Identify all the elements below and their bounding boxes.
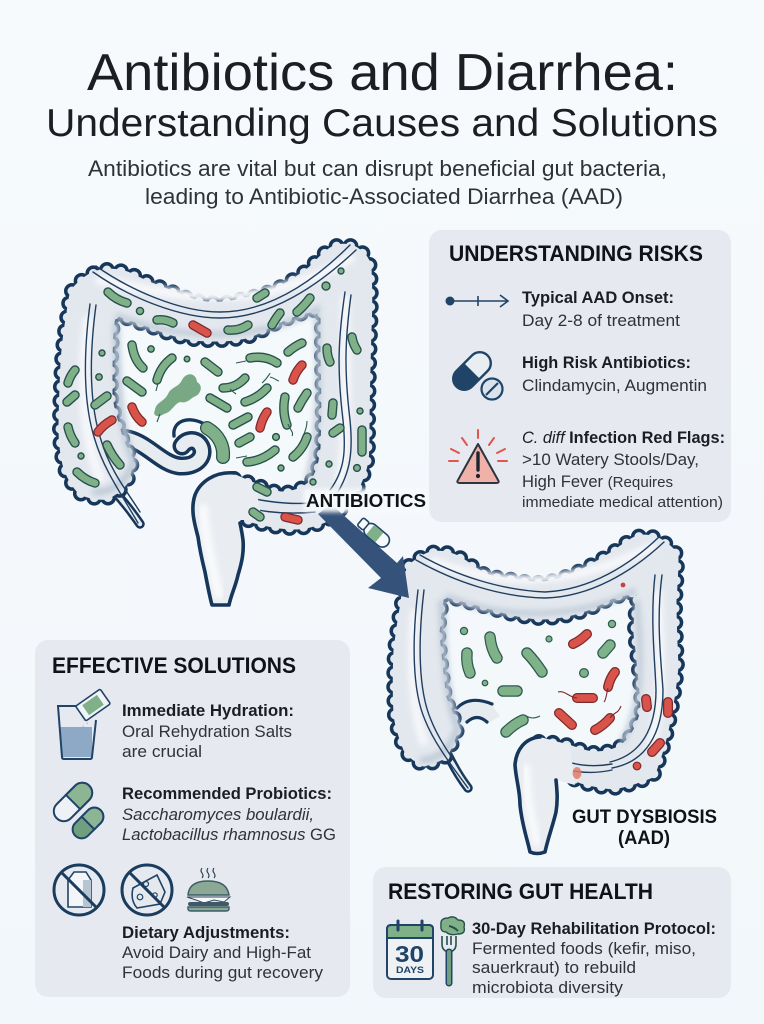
- text: high risk antibiotics: High Risk Antibiotics:: [522, 354, 691, 372]
- text: typical onset: Day 2-8 of treatment: [522, 312, 680, 330]
- icon: 30 day calendar: DAYS: [396, 965, 424, 976]
- arrow: antibiotics to dysbiosis: [318, 504, 409, 598]
- heading: restoring gut health: RESTORING GUT HEALTH: [388, 879, 653, 904]
- text: probiotics: Lactobacillus rhamnosus GG: [122, 826, 336, 844]
- text: red flags: [522, 429, 725, 511]
- label: antibiotics: ANTIBIOTICS: [306, 491, 426, 511]
- text: dietary: Foods during gut recovery: [122, 964, 324, 982]
- label: gut dysbiosis: GUT DYSBIOSIS: [572, 807, 717, 828]
- inner shading: [412, 545, 660, 760]
- text: hydration: Oral Rehydration Salts: [122, 723, 292, 741]
- text: high risk antibiotics: Clindamycin, Augmentin: [522, 377, 707, 395]
- label: gut dysbiosis: (AAD): [618, 828, 670, 849]
- text: rehabilitation protocol: Fermented foods (kefir, miso,: [472, 940, 696, 958]
- text: red flags: >10 Watery Stools/Day,: [522, 451, 699, 469]
- icon: glass with sachet: [58, 689, 110, 759]
- text: hydration: Immediate Hydration:: [122, 702, 294, 720]
- icon: pill and tablet: [449, 348, 502, 400]
- text: probiotics: Saccharomyces boulardii,: [122, 806, 314, 824]
- text: dietary: Dietary Adjustments:: [122, 924, 290, 942]
- red bacteria: [558, 583, 668, 779]
- ileum tube: [122, 420, 206, 466]
- text: dietary: Avoid Dairy and High-Fat: [122, 944, 311, 962]
- heading: understanding risks: UNDERSTANDING RISKS: [449, 241, 703, 266]
- icon: warning triangle: [449, 430, 507, 483]
- text: red flags: immediate medical attention): [522, 494, 723, 511]
- heading: effective solutions: EFFECTIVE SOLUTIONS: [52, 653, 296, 678]
- green bacteria: [67, 268, 363, 517]
- text: typical onset: Typical AAD Onset:: [522, 289, 674, 307]
- text: hydration: [122, 702, 294, 761]
- taenia lines: [414, 536, 664, 788]
- icon: timeline: [446, 295, 508, 307]
- text: rehabilitation protocol: sauerkraut) to rebuild: [472, 959, 636, 977]
- colon body: [60, 245, 371, 528]
- appendix: [113, 490, 140, 524]
- icon: antibiotic vial: [356, 516, 392, 550]
- text: rehabilitation protocol: [472, 920, 716, 997]
- text: typical onset: [522, 289, 680, 330]
- illustration: dysbiosis colon: [394, 536, 677, 854]
- icon: probiotic capsules: [50, 779, 107, 842]
- text: hydration: are crucial: [122, 743, 202, 761]
- red bacteria: [98, 325, 302, 520]
- icon: burger: [187, 868, 230, 911]
- green bacteria: [460, 620, 616, 732]
- inner shading: [84, 258, 350, 492]
- icon: fork with pickle: [441, 917, 464, 983]
- subtitle: leading to Antibiotic-Associated Diarrhea (AAD): [145, 184, 623, 209]
- text: probiotics: Recommended Probiotics:: [122, 785, 332, 803]
- text: rehabilitation protocol: microbiota diversity: [472, 979, 624, 997]
- subtitle: Antibiotics are vital but can disrupt beneficial gut bacteria,: [88, 156, 667, 181]
- appendix: [449, 757, 468, 788]
- taenia lines: [85, 245, 356, 523]
- title: Antibiotics and Diarrhea:: [87, 44, 678, 102]
- colon body: [394, 536, 677, 788]
- text: dietary: [122, 924, 324, 982]
- panel: restoring gut health: [373, 867, 731, 998]
- icon: no milk: [54, 865, 104, 915]
- rectum: [193, 473, 262, 605]
- title: [46, 44, 718, 145]
- text: high risk antibiotics: [522, 354, 707, 395]
- text: red flags: C. diff Infection Red Flags:: [522, 429, 725, 447]
- subtitle: [88, 156, 667, 209]
- text: rehabilitation protocol: 30-Day Rehabilitation Protocol:: [472, 920, 716, 938]
- icon: no cheese: [122, 865, 172, 915]
- rectum: [515, 737, 575, 854]
- panel: effective solutions: [35, 640, 350, 997]
- illustration: healthy colon: [60, 245, 371, 605]
- text: probiotics: [122, 785, 336, 844]
- ileum stub: [455, 700, 500, 724]
- title: Understanding Causes and Solutions: [46, 102, 718, 145]
- label: gut dysbiosis: [572, 807, 717, 849]
- text: red flags: High Fever (Requires: [522, 473, 673, 491]
- icon: 30 day calendar: [387, 921, 433, 979]
- panel: understanding risks: [429, 230, 731, 522]
- icon: 30 day calendar: 30: [395, 941, 424, 967]
